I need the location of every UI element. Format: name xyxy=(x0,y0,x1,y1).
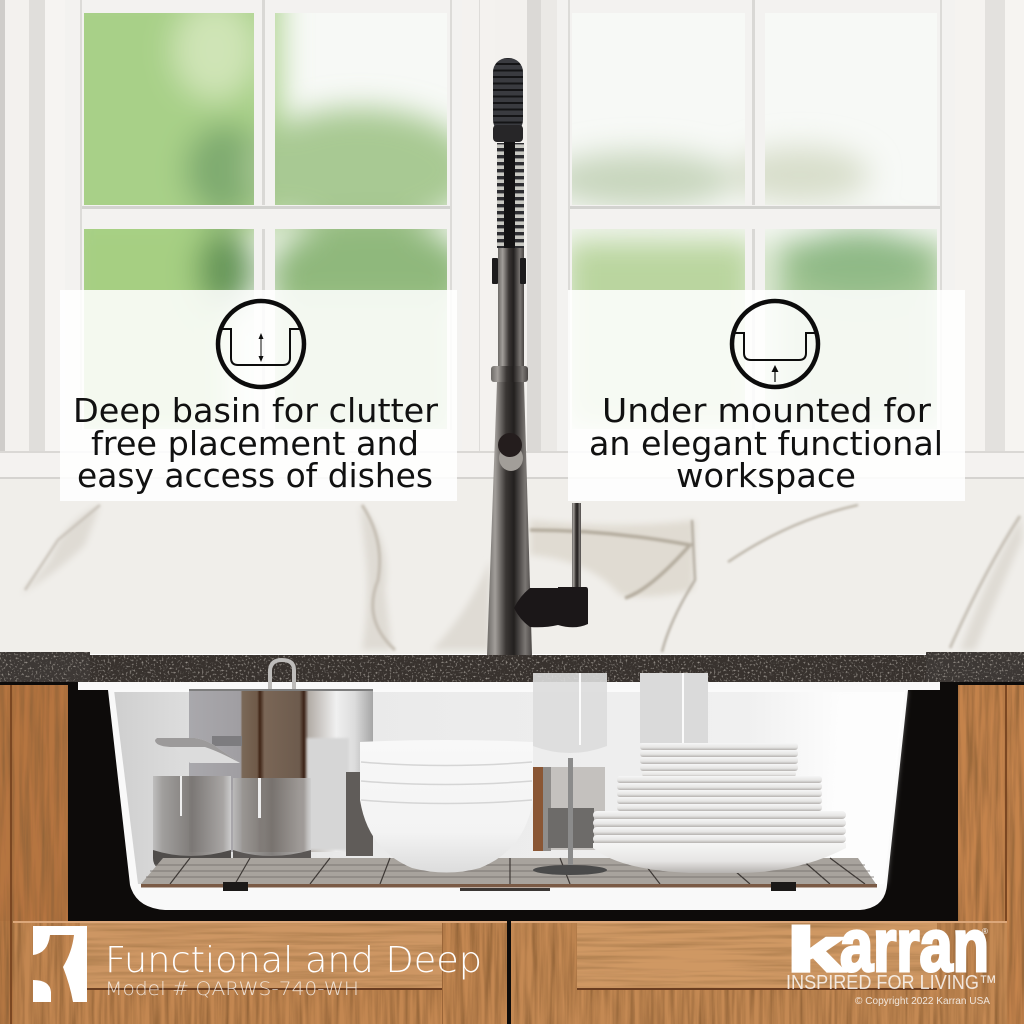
wall and window trim xyxy=(0,0,1024,480)
dishes in the sink xyxy=(141,660,877,891)
callout text: an elegant functional xyxy=(589,424,943,463)
wordmark: arran xyxy=(840,904,989,987)
brand logo xyxy=(786,904,997,1007)
clips xyxy=(492,258,526,284)
tagline: INSPIRED FOR LIVING™ xyxy=(786,972,997,994)
callout text xyxy=(589,391,943,495)
stacked plate blur xyxy=(307,738,349,850)
dark pot behind xyxy=(346,772,373,856)
copyright: © Copyright 2022 Karran USA xyxy=(855,996,990,1007)
countertop xyxy=(0,652,1024,682)
faucet xyxy=(487,58,588,655)
product title block xyxy=(33,926,482,1002)
middle tumbler xyxy=(233,778,311,872)
wine glass xyxy=(533,673,607,875)
title: Functional and Deep xyxy=(105,940,482,981)
window muntins and sashes xyxy=(65,0,955,452)
spray head xyxy=(493,58,523,142)
callout text: workspace xyxy=(676,456,856,495)
cabinet side panels and dark cavity xyxy=(0,682,1024,1024)
spring coil xyxy=(497,143,524,248)
stacked bowls xyxy=(360,740,533,872)
model number: Model # QARWS-740-WH xyxy=(105,978,359,1000)
water glass xyxy=(640,673,708,743)
plates: small stack xyxy=(640,743,798,777)
collar xyxy=(491,366,528,382)
back pot xyxy=(533,767,605,851)
callout text: Deep basin for clutter xyxy=(73,391,438,430)
marble backsplash xyxy=(0,479,1024,654)
callout: deep basin xyxy=(60,290,457,501)
callout: under mounted xyxy=(568,290,965,501)
wire rack xyxy=(141,858,877,891)
sink basin xyxy=(78,682,940,910)
wordmark xyxy=(787,904,989,987)
plates: medium stack xyxy=(617,776,822,811)
callout text xyxy=(73,391,438,495)
window sill xyxy=(0,451,1024,479)
lever xyxy=(572,503,581,589)
registered mark: ® xyxy=(982,927,988,936)
callout panel xyxy=(60,290,457,501)
callout panel xyxy=(568,290,965,501)
icon: deep basin xyxy=(218,301,304,387)
knob xyxy=(498,433,523,471)
upper tube xyxy=(498,248,524,368)
callout text: free placement and xyxy=(91,424,419,463)
black spout xyxy=(514,587,588,627)
callout text: Under mounted for xyxy=(602,391,931,430)
callout text: easy access of dishes xyxy=(77,456,433,495)
stock pot xyxy=(189,660,373,852)
window view: blurred garden xyxy=(84,13,937,429)
plates: large stack xyxy=(593,811,846,873)
pot side handle xyxy=(155,736,242,763)
wordmark: k xyxy=(787,916,844,985)
cabinet doors xyxy=(13,921,1007,1024)
logo mark xyxy=(33,926,87,1002)
left door xyxy=(13,921,507,1024)
left tumbler xyxy=(153,776,231,872)
right door xyxy=(511,921,1007,1024)
icon: under mount xyxy=(732,301,818,387)
tapered body xyxy=(487,382,532,655)
